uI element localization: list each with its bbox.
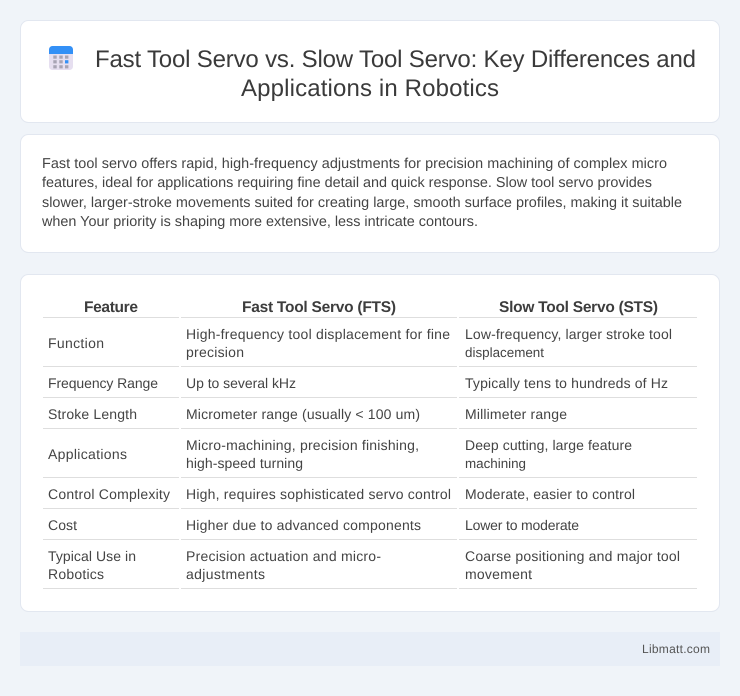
text block: summary: features, ideal for applications requiring fine detail and quick response. Slow tool servo provides: [42, 175, 652, 191]
row: frequency range: [48, 375, 668, 391]
row: function: [48, 326, 672, 360]
row: stroke length: Stroke Length: [48, 406, 137, 422]
row: control complexity: [48, 486, 635, 502]
row: frequency range: Frequency Range: [48, 375, 158, 391]
row: cost: Higher due to advanced components: [186, 517, 421, 533]
row: typical use in robotics: movement: [465, 566, 532, 582]
title: Fast Tool Servo vs. Slow Tool Servo: Key Differences and: [95, 46, 696, 73]
row: frequency range: Typically tens to hundreds of Hz: [465, 375, 668, 391]
title: Applications in Robotics: [241, 75, 499, 102]
panel: title card: [20, 20, 720, 122]
row: applications: [48, 437, 632, 471]
footer: [20, 632, 720, 666]
row: cost: Lower to moderate: [465, 517, 579, 533]
row: stroke length: [48, 406, 567, 422]
row: typical use in robotics: [48, 548, 680, 582]
row: function: Low-frequency, larger stroke tool: [465, 326, 672, 342]
row: control complexity: Moderate, easier to control: [465, 486, 635, 502]
row: stroke length: Millimeter range: [465, 406, 567, 422]
table header: Fast Tool Servo (FTS): [242, 299, 396, 316]
row: frequency range: Up to several kHz: [186, 375, 296, 391]
row: control complexity: High, requires sophisticated servo control: [186, 486, 451, 502]
text block: summary: Fast tool servo offers rapid, high-frequency adjustments for precision machining of complex micro: [42, 156, 667, 172]
table header: Feature: [84, 299, 138, 316]
row: cost: Cost: [48, 517, 77, 533]
footer: Libmatt.com: [642, 642, 710, 656]
row: function: High-frequency tool displacement for fine: [186, 326, 450, 342]
table header: [84, 299, 658, 316]
title: [95, 46, 696, 102]
row: applications: machining: [465, 456, 526, 471]
row: function: displacement: [465, 345, 544, 360]
row: typical use in robotics: Precision actuation and micro-: [186, 548, 381, 564]
row: applications: Micro-machining, precision finishing,: [186, 437, 419, 453]
text block: summary: [41, 156, 682, 230]
text block: summary: slower, larger-stroke movements suited for creating large, smooth surface profiles, making it suitable: [42, 195, 682, 211]
row: applications: Deep cutting, large feature: [465, 437, 632, 453]
panel: comparison table: [20, 274, 720, 612]
row: function: precision: [186, 344, 244, 360]
row: applications: high-speed turning: [186, 455, 303, 471]
icon: calendar: [49, 46, 73, 70]
row: stroke length: Micrometer range (usually < 100 um): [186, 406, 420, 422]
row: cost: [48, 517, 579, 533]
row: typical use in robotics: adjustments: [186, 566, 265, 582]
row: typical use in robotics: Coarse positioning and major tool: [465, 548, 680, 564]
row: control complexity: Control Complexity: [48, 486, 170, 502]
row: function: Function: [48, 335, 104, 351]
row: typical use in robotics: Robotics: [48, 566, 104, 582]
table header: Slow Tool Servo (STS): [499, 299, 658, 316]
row: applications: Applications: [48, 446, 127, 462]
panel: summary paragraph: [20, 134, 720, 252]
text block: summary: when Your priority is shaping more extensive, less intricate contours.: [41, 214, 478, 230]
row: typical use in robotics: Typical Use in: [48, 548, 136, 564]
